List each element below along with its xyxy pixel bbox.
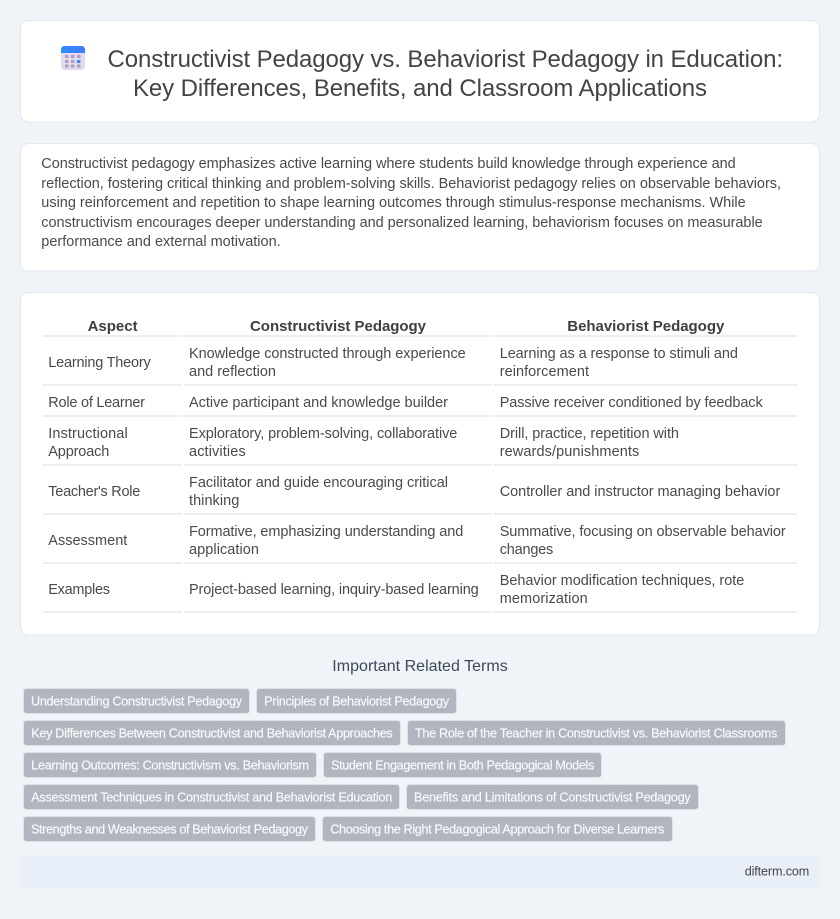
table row: learning theory: Learning Theory	[48, 355, 151, 371]
tag: principles of behaviorist pedagogy: Principles of Behaviorist Pedagogy	[264, 694, 450, 708]
tag: benefits and limitations: Benefits and Limitations of Constructivist Pedagogy	[414, 790, 691, 804]
table row: learning theory	[43, 346, 797, 386]
tag: student engagement: Student Engagement in Both Pedagogical Models	[331, 758, 594, 772]
title	[108, 46, 783, 102]
table row: learning theory: and reflection	[189, 364, 276, 380]
tag: key differences	[24, 720, 400, 746]
table row: role of learner: Passive receiver conditioned by feedback	[500, 395, 763, 411]
tag: learning outcomes	[24, 752, 316, 778]
table row: teacher's role	[43, 475, 797, 514]
tag: strengths and weaknesses	[24, 816, 316, 842]
table row: assessment: application	[189, 542, 259, 558]
header panel	[20, 20, 820, 122]
table row: instructional approach	[43, 426, 797, 466]
title: Key Differences, Benefits, and Classroom Applications	[133, 75, 707, 102]
table row: role of learner: Role of Learner	[48, 395, 145, 411]
table row: examples: Behavior modification techniques, rote	[500, 573, 744, 589]
tag: understanding constructivist pedagogy: Understanding Constructivist Pedagogy	[31, 694, 243, 708]
panel: comparison table	[20, 292, 820, 635]
table row: learning theory: Learning as a response to stimuli and	[500, 346, 738, 362]
table row: teacher's role: Facilitator and guide encouraging critical	[189, 475, 448, 491]
table row: assessment	[43, 524, 797, 564]
table row: role of learner	[43, 395, 797, 416]
text block: intro paragraph: reflection, fostering critical thinking and problem-solving skills. Behaviorist pedagogy relies on observable behaviors,	[41, 176, 781, 192]
tag: choosing the right approach	[322, 816, 672, 842]
table header row: Constructivist Pedagogy	[250, 318, 427, 335]
footer bar: difterm.com	[745, 865, 809, 879]
table row: instructional approach: Exploratory, problem-solving, collaborative	[189, 426, 457, 442]
tag: benefits and limitations	[406, 784, 698, 810]
table row: teacher's role: Teacher's Role	[48, 484, 140, 500]
text block: intro paragraph: constructivism encourages deeper understanding and personalized learning, behaviorism focuses on measurable	[41, 215, 763, 231]
tag: student engagement	[324, 752, 602, 778]
table row: teacher's role: thinking	[189, 493, 239, 509]
tag: key differences: Key Differences Between Constructivist and Behaviorist Approaches	[31, 726, 393, 740]
tag: choosing the right approach: Choosing the Right Pedagogical Approach for Diverse Learners	[330, 822, 664, 836]
table row: instructional approach: activities	[189, 444, 246, 460]
text block: intro paragraph: performance and external motivation.	[41, 234, 281, 250]
tag: learning outcomes: Learning Outcomes: Constructivism vs. Behaviorism	[31, 758, 309, 772]
table row: examples: memorization	[500, 591, 588, 607]
footer bar	[20, 855, 820, 889]
table header row: Behaviorist Pedagogy	[567, 318, 725, 335]
table row: assessment: Summative, focusing on observable behavior	[500, 524, 786, 540]
table row: teacher's role: Controller and instructor managing behavior	[500, 484, 780, 500]
table row: assessment: Formative, emphasizing understanding and	[189, 524, 463, 540]
tag: assessment techniques	[24, 784, 400, 810]
title: Constructivist Pedagogy vs. Behaviorist Pedagogy in Education:	[108, 46, 783, 73]
table row: learning theory: Knowledge constructed through experience	[189, 346, 466, 362]
tag: understanding constructivist pedagogy	[24, 688, 250, 714]
text block: intro paragraph: Constructivist pedagogy emphasizes active learning where students build knowledge through experience and	[41, 156, 736, 172]
panel: introduction	[20, 144, 820, 271]
table row: learning theory: reinforcement	[500, 364, 589, 380]
tag: principles of behaviorist pedagogy	[256, 688, 456, 714]
text block: intro paragraph: using reinforcement and repetition to shape learning outcomes through stimulus-response mechanisms. While	[41, 195, 746, 211]
table row: instructional approach: Drill, practice, repetition with	[500, 426, 679, 442]
related terms tags	[24, 688, 786, 842]
table row: role of learner: Active participant and knowledge builder	[189, 395, 448, 411]
table row: examples: Examples	[48, 582, 110, 598]
heading: important related terms: Important Related Terms	[332, 658, 508, 675]
table header row: Aspect	[88, 318, 138, 335]
table row: assessment: changes	[500, 542, 553, 558]
tag: assessment techniques: Assessment Techniques in Constructivist and Behaviorist Education	[31, 790, 392, 804]
table header row	[43, 318, 797, 336]
table row: examples: Project-based learning, inquiry-based learning	[189, 582, 479, 598]
table row: instructional approach: rewards/punishments	[500, 444, 639, 460]
tag: strengths and weaknesses: Strengths and Weaknesses of Behaviorist Pedagogy	[31, 822, 309, 836]
table row: instructional approach: Approach	[48, 444, 109, 460]
tag: role of the teacher: The Role of the Teacher in Constructivist vs. Behaviorist Classrooms	[415, 726, 777, 740]
icon: calendar	[61, 46, 85, 70]
table row: instructional approach: Instructional	[48, 426, 128, 442]
table row: assessment: Assessment	[48, 533, 127, 549]
text block: intro paragraph	[41, 156, 781, 250]
table row: examples	[43, 573, 797, 612]
tag: role of the teacher	[408, 720, 786, 746]
